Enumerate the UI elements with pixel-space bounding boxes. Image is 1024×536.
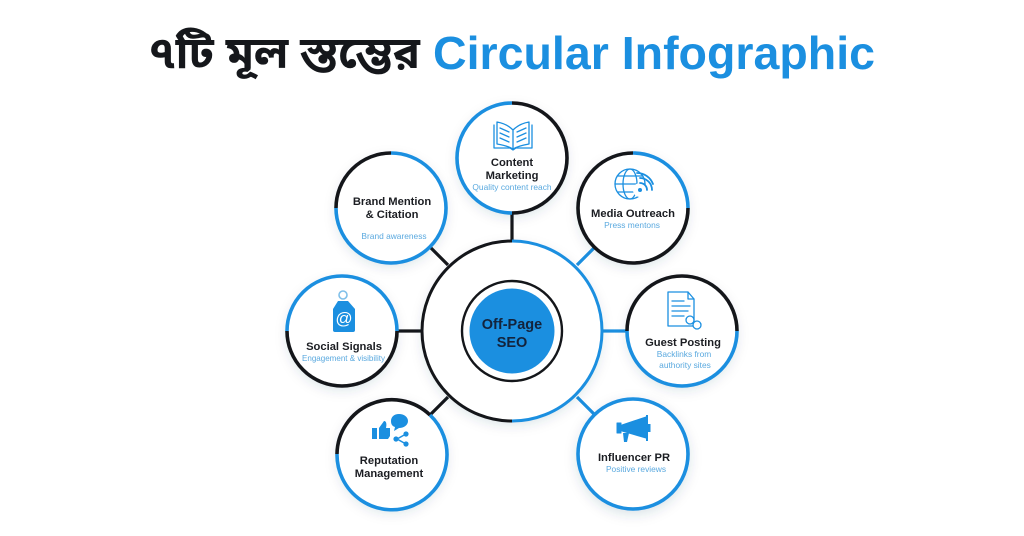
node: Guest Posting (627, 276, 737, 386)
node: Influencer PR (578, 399, 688, 509)
label: Social Signals (306, 341, 382, 353)
central hub (422, 241, 602, 421)
label: Reputation (360, 455, 418, 467)
center label: Off-Page (482, 317, 542, 333)
node: Content Marketing (457, 103, 567, 213)
icon: open book (494, 122, 532, 150)
icon: document with link (668, 292, 701, 329)
icon: tag with at sign: @ (335, 309, 353, 328)
center label: SEO (497, 335, 527, 351)
node: Brand Mention & Citation (336, 153, 446, 263)
sublabel: Press mentons (604, 220, 660, 230)
node: Media Outreach (578, 153, 688, 263)
label: Media Outreach (591, 208, 675, 220)
label: & Citation (366, 209, 419, 221)
inner ring (462, 281, 562, 381)
sublabel: Brand awareness (361, 231, 427, 241)
icon: globe with signal (615, 169, 653, 199)
center disc (470, 288, 554, 374)
sublabel: Positive reviews (606, 464, 666, 474)
title: Latin part: Circular Infographic (433, 27, 875, 79)
sublabel: Quality content reach (472, 182, 552, 192)
title: Bengali part: ৭টি মূল স্তম্ভের (148, 27, 421, 86)
connectors (397, 213, 627, 415)
node: Social Signals (287, 276, 397, 386)
sublabel: Backlinks from (657, 349, 711, 359)
label: Guest Posting (645, 337, 721, 349)
sublabel: Engagement & visibility (302, 353, 386, 363)
label: Management (355, 468, 423, 480)
label: Marketing (486, 170, 539, 182)
icon: thumb, bubble, share (372, 414, 409, 447)
node: Reputation Management (337, 399, 447, 510)
icon: megaphone (617, 415, 650, 442)
label: Influencer PR (598, 452, 670, 464)
title (148, 27, 875, 86)
label: Content (491, 157, 533, 169)
outer ring (422, 241, 602, 421)
sublabel: authority sites (659, 360, 711, 370)
label: Brand Mention (353, 196, 431, 208)
